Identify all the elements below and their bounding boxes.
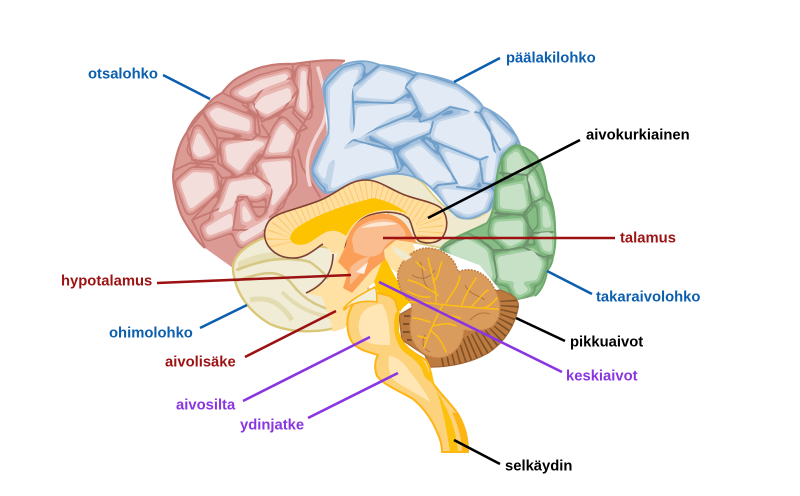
cerebellum: pikkuaivot [388,248,518,367]
leader line: ydinjatke [308,373,398,418]
label: aivosilta: aivosilta [176,398,236,414]
label: keskiaivot: keskiaivot [566,368,638,384]
label: aivolisäke: aivolisäke [165,354,236,370]
corpus callosum: aivokurkiainen [265,180,447,293]
leader line: keskiaivot [379,282,562,372]
occipital lobe: takaraivolohko [440,145,555,300]
parietal lobe: päälakilohko [312,61,520,219]
leader line: otsalohko [163,75,210,99]
label: ydinjatke: ydinjatke [240,418,304,434]
label: talamus: talamus [620,230,676,246]
leader line: takaraivolohko [547,271,592,294]
label: hypotalamus: hypotalamus [61,274,152,290]
label: päälakilohko: päälakilohko [506,50,596,66]
leader line: ohimolohko [200,305,247,328]
label: ohimolohko: ohimolohko [109,326,193,342]
leader line: aivolisäke [245,311,336,357]
leader line: aivokurkiainen [428,140,580,218]
leader line: talamus [383,237,615,239]
brainstem: aivosilta, ydinjatke, keskiaivot, selkäydin [344,246,468,452]
label: aivokurkiainen: aivokurkiainen [586,128,690,144]
label: takaraivolohko: takaraivolohko [596,290,700,306]
leader line: päälakilohko [454,58,500,82]
leader line: pikkuaivot [516,318,565,341]
leader line: selkäydin [454,440,500,464]
diencephalon and light yellow surroundings [305,220,415,332]
label: otsalohko: otsalohko [88,66,158,82]
leader line: aivosilta [243,337,370,401]
label: selkäydin: selkäydin [505,458,572,474]
label: pikkuaivot: pikkuaivot [570,334,643,350]
inner cream cortex behind corpus callosum [360,173,495,248]
temporal lobe: ohimolohko [233,238,375,331]
thalamus: talamus [338,214,417,293]
frontal lobe: otsalohko [173,60,350,268]
leader line: hypotalamus [157,275,351,283]
